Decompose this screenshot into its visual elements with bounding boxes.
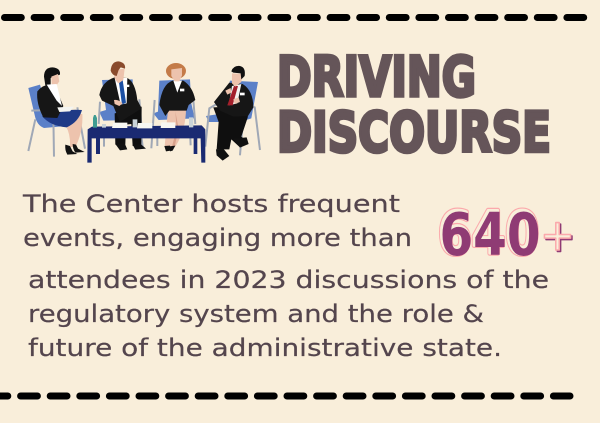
body text	[22, 190, 549, 362]
person: woman with red hair	[159, 63, 195, 151]
title	[277, 45, 551, 164]
chair: left woman	[28, 85, 85, 157]
top dashed border	[4, 14, 586, 21]
person: man with red tie	[213, 66, 253, 161]
title line 1: DRIVING	[277, 45, 476, 109]
chair: third person	[151, 79, 195, 148]
statistic: 640+: 640	[438, 198, 539, 268]
person: left woman	[37, 67, 85, 155]
table	[87, 115, 205, 163]
line 5: future of the administrative state.	[28, 334, 502, 362]
statistic: 640+: 640	[438, 198, 539, 268]
chair: right man	[205, 81, 260, 155]
person: man with blue tie	[99, 61, 146, 150]
line 3: attendees in 2023 discussions of the	[28, 266, 549, 294]
bottom dashed border	[0, 392, 570, 400]
statistic: 640+: +	[540, 210, 575, 261]
line 4: regulatory system and the role &	[28, 300, 484, 328]
table items: glasses	[102, 117, 193, 128]
table items: papers	[112, 122, 175, 128]
statistic: 640+: +	[542, 212, 576, 262]
line 2: events, engaging more than	[23, 224, 412, 252]
table items: bottle	[93, 115, 97, 128]
chair: second person	[99, 79, 143, 147]
statistic: 640+: 640	[440, 200, 540, 269]
line 1: The Center hosts frequent	[22, 190, 400, 218]
illustration: panel discussion	[28, 61, 260, 163]
